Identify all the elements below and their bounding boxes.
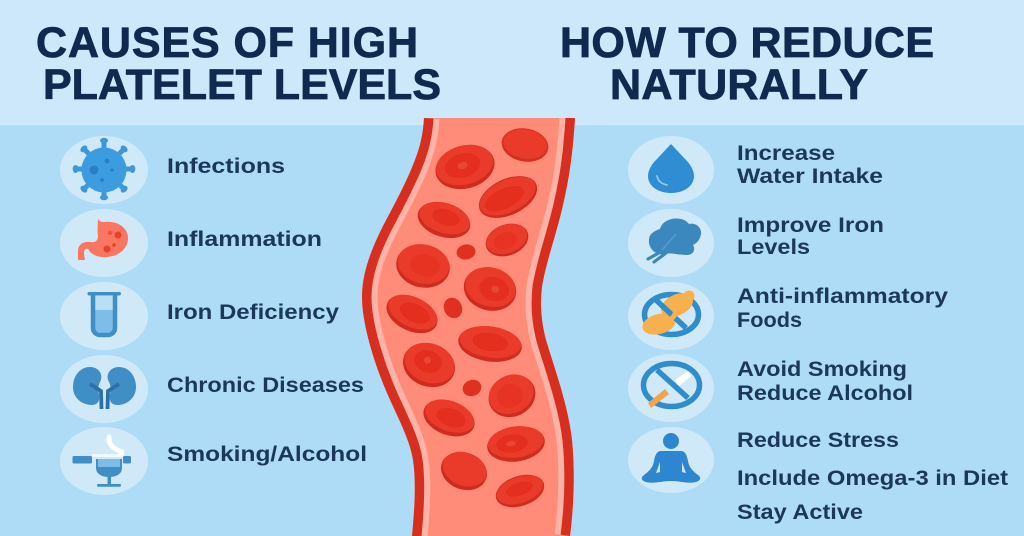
cause: smoking and alcohol: Smoking/Alcohol (167, 442, 367, 466)
cause: infections (60, 136, 285, 204)
cause: infections: Infections (167, 154, 285, 178)
remedy: avoid smoking and alcohol: Avoid Smoking (737, 357, 907, 381)
panel: causes list (60, 136, 367, 495)
remedy: anti-inflammatory foods: Anti-inflammatory (737, 284, 948, 308)
title: how to reduce: HOW TO REDUCE (560, 19, 934, 67)
cause: chronic diseases: Chronic Diseases (167, 373, 364, 397)
remedy: anti-inflammatory foods: Foods (737, 308, 802, 332)
remedy: meditation and lifestyle: Reduce Stress (737, 428, 899, 452)
remedy: meditation and lifestyle (628, 427, 1008, 524)
cause: iron deficiency (60, 282, 339, 350)
cause: chronic diseases (60, 355, 364, 423)
cause: iron deficiency: Iron Deficiency (167, 300, 339, 324)
red blood cells (380, 125, 551, 513)
cause: smoking and alcohol (60, 427, 367, 495)
remedy: iron levels: Improve Iron (737, 213, 884, 237)
cause: inflammation (60, 209, 322, 277)
remedy: avoid smoking and alcohol: Reduce Alcohol (737, 381, 913, 405)
remedy: anti-inflammatory foods (628, 282, 948, 350)
remedy: water intake: Water Intake (737, 164, 883, 188)
remedy: meditation and lifestyle: Stay Active (737, 500, 863, 524)
title: causes: CAUSES OF HIGH (36, 19, 418, 67)
title: causes: PLATELET LEVELS (43, 61, 441, 109)
title: how to reduce (560, 19, 934, 109)
remedy: meditation and lifestyle: Include Omega-3 in Diet (737, 466, 1008, 490)
header band (0, 0, 1024, 125)
remedy: water intake (628, 136, 883, 204)
remedy: iron levels (628, 209, 884, 277)
blood vessel illustration (362, 118, 575, 536)
remedy: avoid smoking and alcohol (628, 354, 913, 422)
title: how to reduce: NATURALLY (610, 61, 868, 109)
cause: inflammation: Inflammation (167, 227, 322, 251)
remedy: water intake: Increase (737, 141, 835, 165)
remedy: iron levels: Levels (737, 235, 810, 259)
panel: how to reduce list (628, 136, 1008, 524)
title: causes (36, 19, 441, 109)
